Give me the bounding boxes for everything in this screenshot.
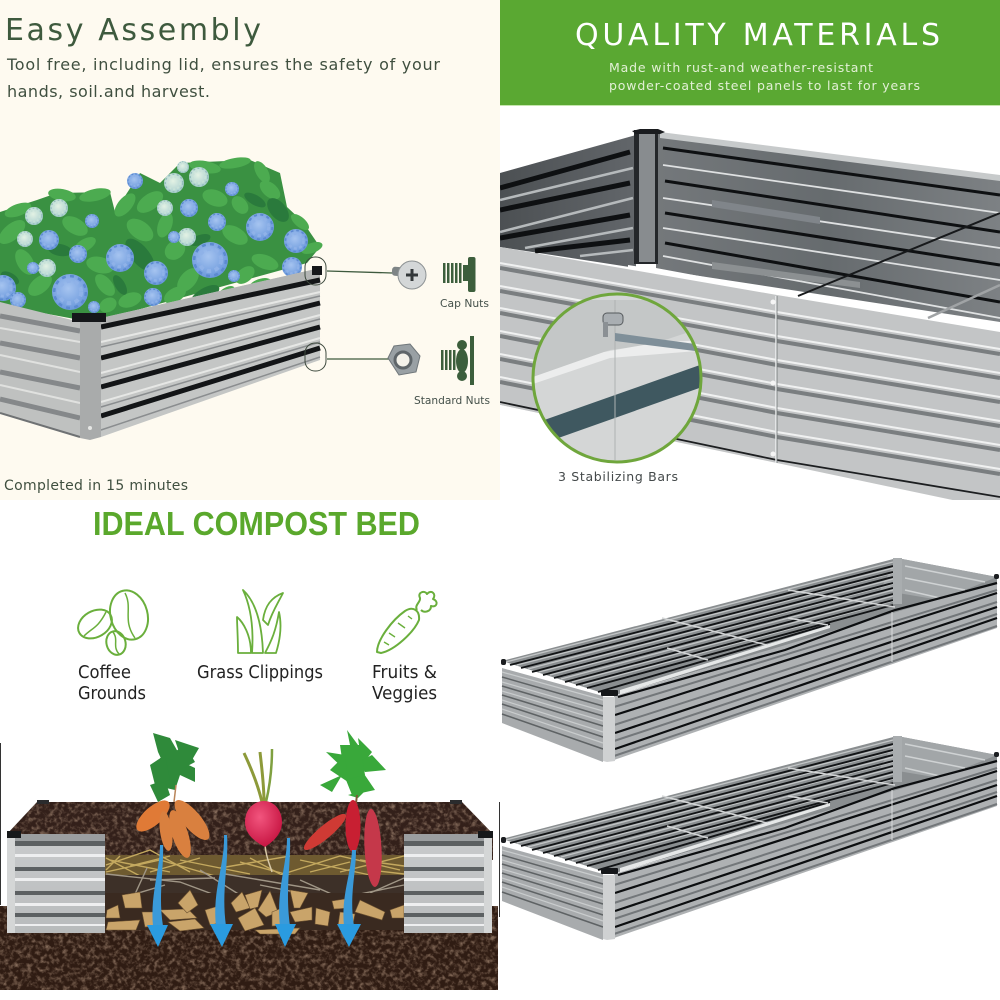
icon: grass xyxy=(237,590,283,653)
label: Coffee Grounds: Coffee xyxy=(78,663,131,683)
label: Standard Nuts: Standard Nuts xyxy=(414,395,490,407)
label: Cap Nuts: Cap Nuts xyxy=(440,298,489,310)
callout: cap nuts xyxy=(305,257,489,310)
firewood layer xyxy=(105,890,404,934)
callout: standard nuts xyxy=(305,336,490,407)
magnifier: stabilizing bar detail xyxy=(530,294,710,462)
icon: carrot xyxy=(377,592,437,653)
corner post xyxy=(632,129,665,264)
white gap xyxy=(628,265,1000,333)
icon: cap nut diagram xyxy=(443,257,476,292)
panel: quality materials header xyxy=(500,0,1000,106)
illustration: bed interior and front wall close-up xyxy=(500,129,1000,520)
heading: IDEAL COMPOST BED: IDEAL COMPOST BED xyxy=(93,505,420,542)
plant: radish xyxy=(244,749,282,872)
illustration: compost layers diagram xyxy=(0,730,500,990)
plant: red sweet potatoes xyxy=(300,730,386,887)
stabilizing bars xyxy=(798,213,1000,318)
label: Fruits & Veggies xyxy=(372,663,437,704)
back right wall xyxy=(656,132,1000,332)
right steel panel xyxy=(404,831,493,933)
label: Coffee Grounds: Grounds xyxy=(78,684,146,704)
compost ingredient: grass clippings xyxy=(197,590,323,683)
sticks layer xyxy=(105,868,404,905)
plant: sweet potatoes orange xyxy=(131,733,215,860)
product photo: long raised bed bottom xyxy=(501,736,999,940)
compost ingredient: fruits and veggies xyxy=(372,592,437,704)
front wall xyxy=(500,247,1000,510)
text: assembly description: hands, soil.and harvest. xyxy=(7,82,210,101)
ground soil xyxy=(0,906,498,990)
panel: easy assembly xyxy=(0,0,500,500)
text: assembly description xyxy=(6,55,440,101)
icon: screw xyxy=(392,261,426,289)
text: assembly description: Tool free, including lid, ensures the safety of your xyxy=(6,55,440,74)
text: completed in 15 minutes: Completed in 15 minutes xyxy=(4,478,188,494)
arrow: water flow 1 xyxy=(147,845,168,947)
back left wall xyxy=(500,135,636,268)
illustration: foliage and hydrangeas xyxy=(0,155,324,320)
label: Fruits & Veggies: Veggies xyxy=(372,684,437,704)
label: Coffee Grounds xyxy=(78,663,146,704)
label: Grass Clippings: Grass Clippings xyxy=(197,663,323,683)
arrow: water flow 4 xyxy=(337,850,361,947)
text: materials description: Made with rust-and weather-resistant xyxy=(609,60,873,75)
text: materials description xyxy=(609,60,920,93)
straw layer xyxy=(105,850,404,878)
label: 3 Stabilizing Bars: 3 Stabilizing Bars xyxy=(558,469,678,484)
left steel panel xyxy=(7,831,105,933)
text: materials description: powder-coated steel panels to last for years xyxy=(609,78,920,93)
label: Fruits & Veggies: Fruits & xyxy=(372,663,437,683)
product photo: long raised bed top xyxy=(501,558,999,762)
bed soil layer xyxy=(0,800,498,862)
heading: Easy Assembly: Easy Assembly xyxy=(5,13,261,48)
heading: QUALITY MATERIALS: QUALITY MATERIALS xyxy=(575,18,940,53)
icon: coffee beans xyxy=(73,586,153,657)
illustration: garden bed corner xyxy=(0,266,322,440)
icon: hex nut xyxy=(388,344,420,375)
arrow: water flow 3 xyxy=(275,838,296,947)
icon: standard nut diagram xyxy=(441,336,474,385)
bed corner brackets xyxy=(37,800,462,804)
compost ingredient: coffee grounds xyxy=(73,586,153,704)
arrow: water flow 2 xyxy=(210,835,233,947)
